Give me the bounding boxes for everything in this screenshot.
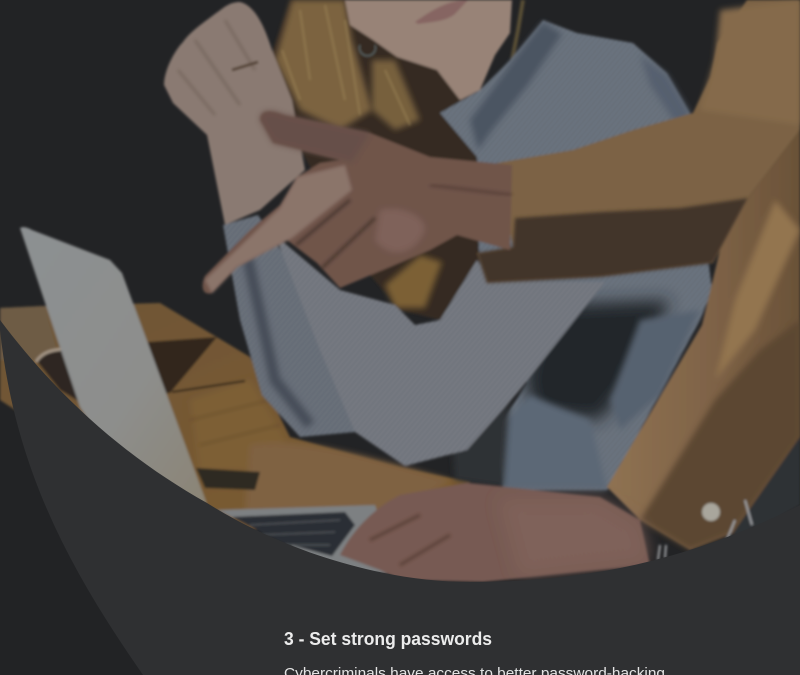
shirt button bbox=[702, 503, 720, 521]
man's forearm sleeve bbox=[477, 0, 800, 283]
shirt stripes under sleeve bbox=[658, 437, 800, 560]
curved dark panel bbox=[0, 320, 800, 675]
near sweater sleeve bbox=[223, 215, 365, 437]
keyboard bbox=[217, 505, 400, 575]
sweater torso bbox=[440, 20, 712, 490]
far forearm sweater sleeve bbox=[275, 235, 605, 466]
wooden table bbox=[0, 303, 470, 530]
woman's face and neck bbox=[345, 0, 512, 100]
laptop lid bbox=[20, 227, 207, 504]
hair bbox=[273, 0, 523, 320]
man's second arm sleeve bbox=[607, 130, 800, 550]
woman's clasped hands bbox=[164, 2, 305, 225]
man's hand on keyboard bbox=[340, 483, 650, 582]
heading: 3 - Set strong passwords: 3 - Set strong passwords bbox=[284, 629, 492, 649]
dark box on table bbox=[36, 337, 217, 405]
man's pointing hand bbox=[203, 111, 512, 294]
